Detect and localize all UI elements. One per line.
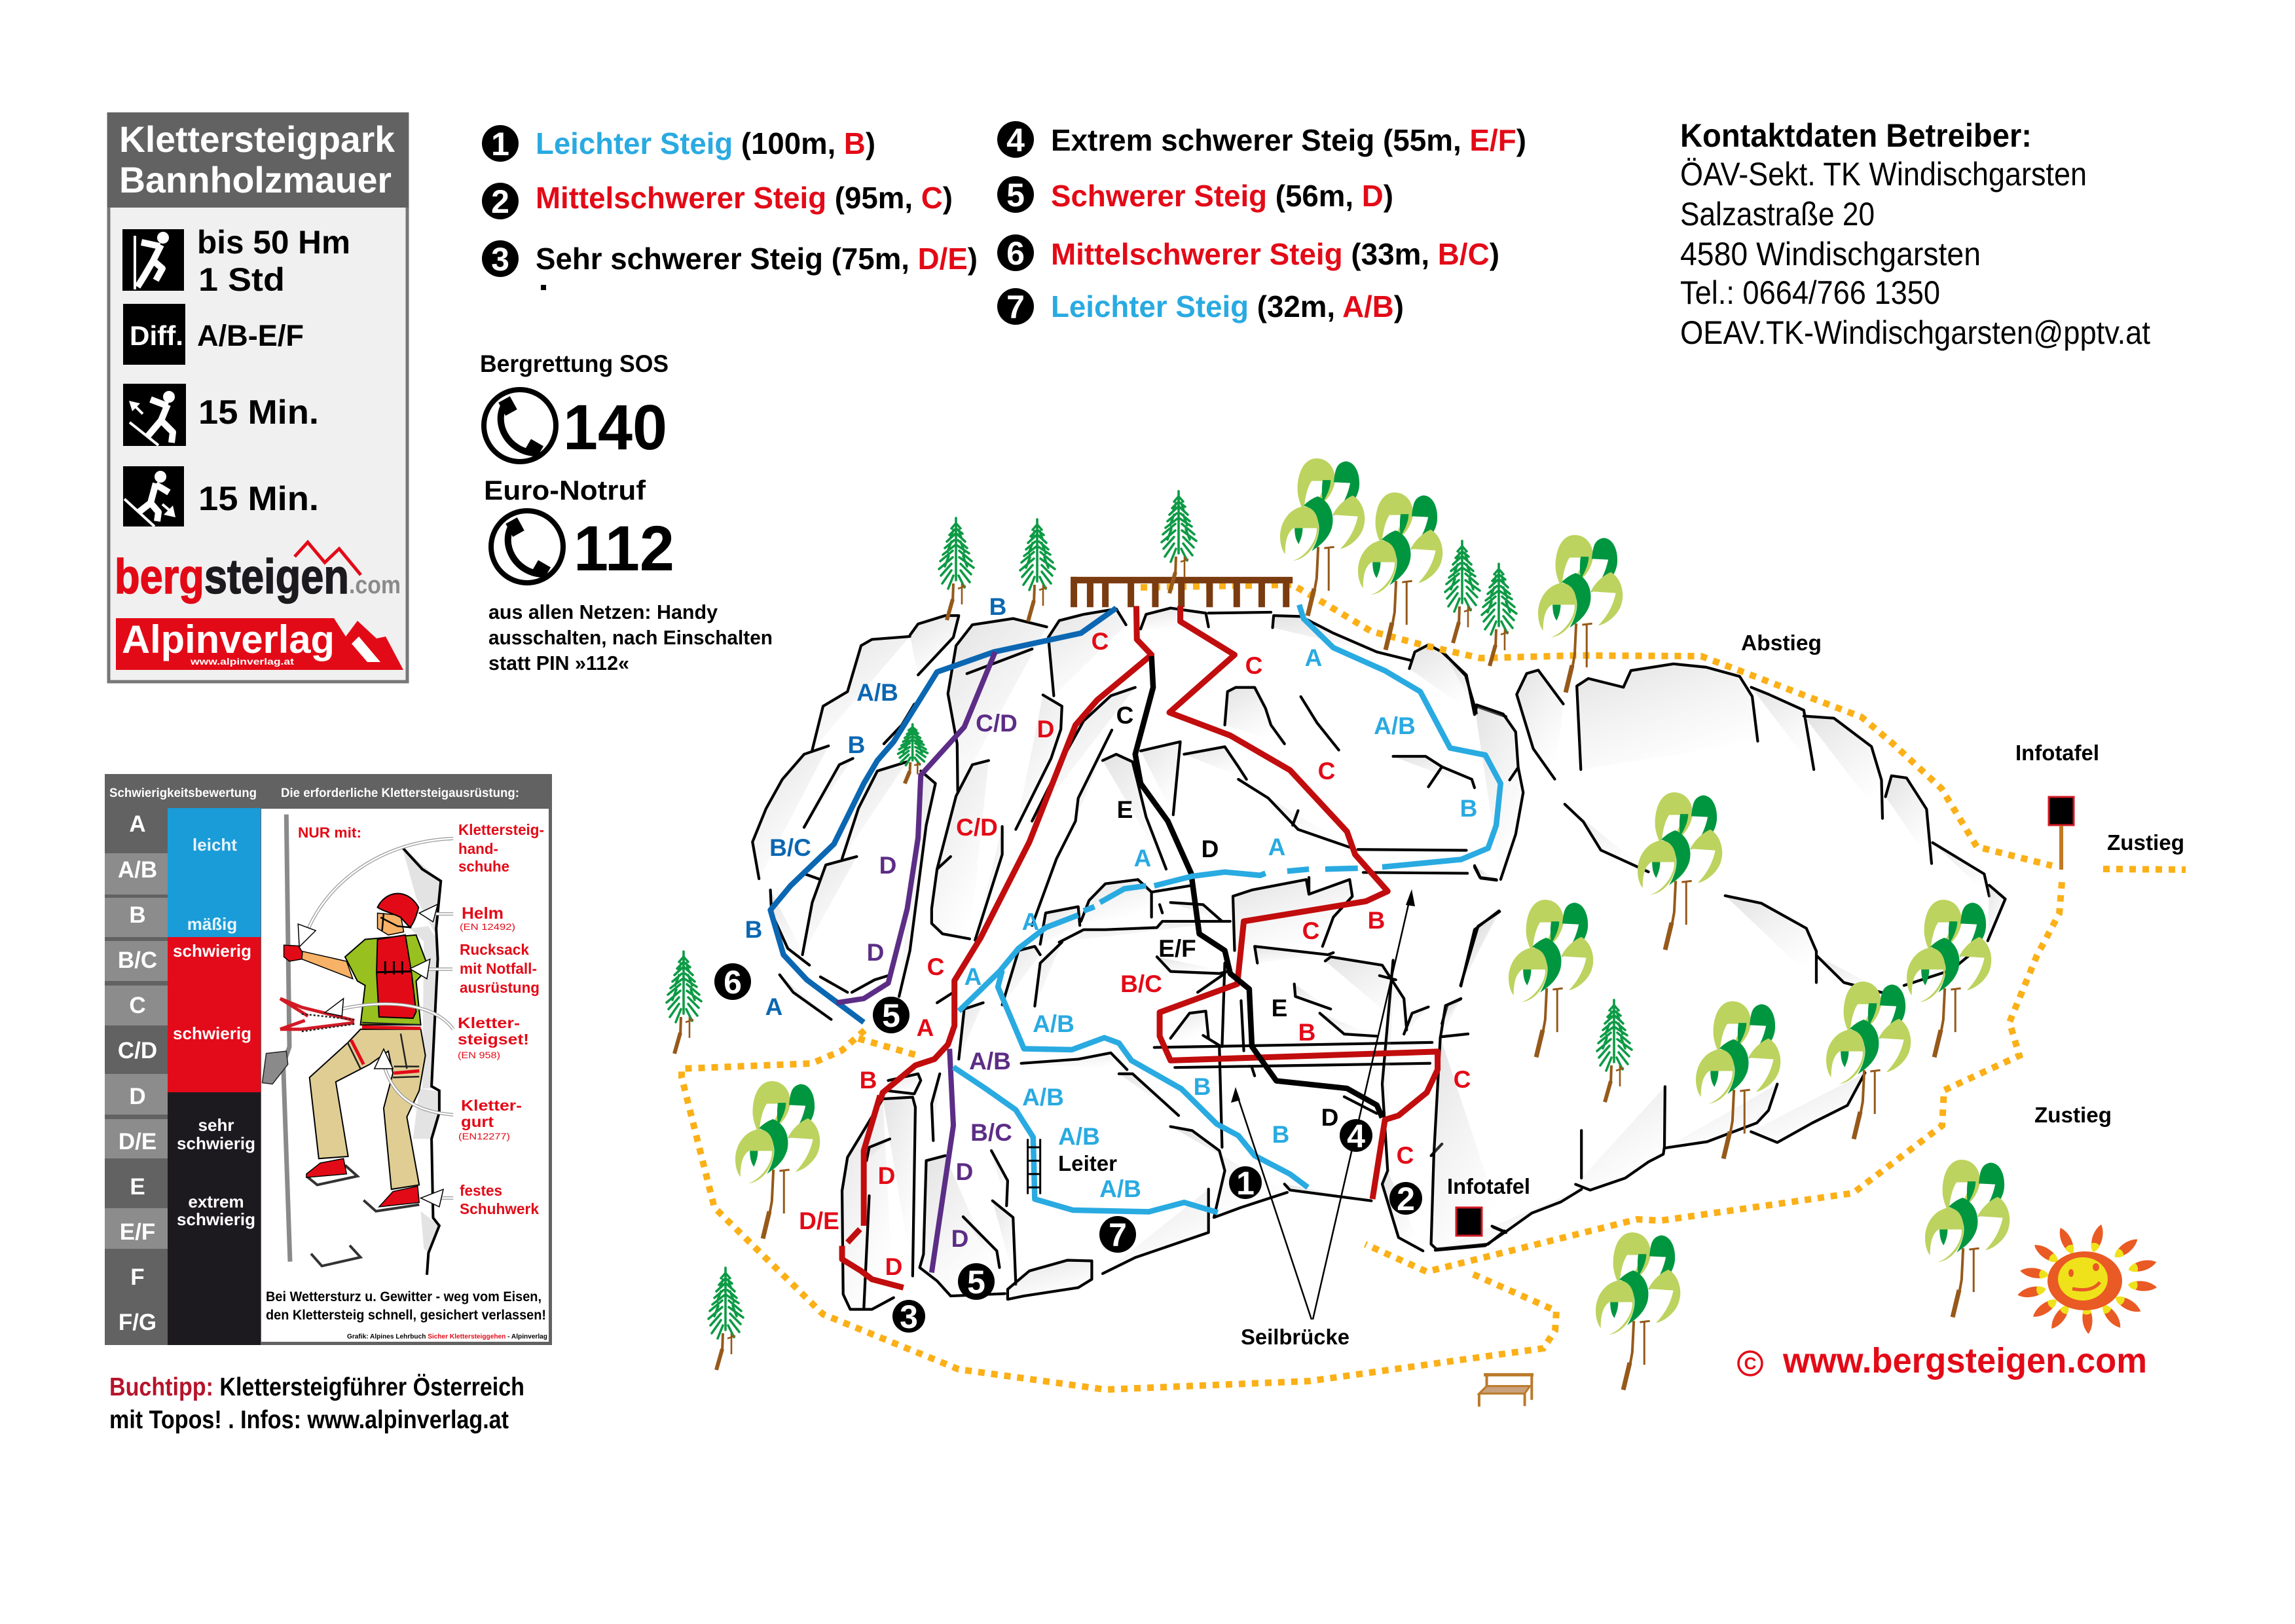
contact details <box>1680 117 2150 351</box>
logo: bergsteigen.com: .com <box>349 572 401 599</box>
route 7: 7 <box>1006 289 1025 325</box>
footpath: Zustieg legend <box>2103 869 2186 870</box>
sun <box>2017 1223 2157 1334</box>
marker 3: 3 <box>900 1299 918 1335</box>
marker 5 <box>958 1263 995 1301</box>
labels: red routes: C <box>1302 917 1319 944</box>
label: Abstieg: Abstieg <box>1741 631 1822 655</box>
text: height and duration <box>197 224 350 298</box>
labels: route 5: D <box>956 1158 973 1185</box>
panel heading: Klettersteigpark <box>119 119 395 160</box>
conifer trees <box>667 491 1632 1370</box>
heading: Bergrettung SOS: Bergrettung SOS <box>480 350 669 377</box>
footpath: spur to start <box>858 1039 918 1056</box>
logo: Alpinverlag: Alpinverlag <box>122 618 335 661</box>
equipment labels: Kletter- <box>458 1014 520 1031</box>
labels: black route: E/F <box>1158 935 1196 962</box>
equipment labels: Klettersteig- <box>458 821 544 838</box>
conifer <box>1482 564 1516 666</box>
illustration: climber on via ferrata <box>262 815 453 1275</box>
tree <box>1280 458 1365 616</box>
book tip: mit Topos! . Infos: www.alpinverlag.at <box>109 1406 509 1434</box>
labels: light blue routes: A/B <box>1022 1084 1064 1111</box>
tree <box>1907 900 1991 1057</box>
storm warning <box>266 1289 546 1323</box>
label: Infotafel upper: Infotafel <box>2015 741 2099 765</box>
marker 7: 7 <box>1109 1217 1127 1253</box>
tree <box>1596 1232 1680 1390</box>
contact details: Kontaktdaten Betreiber: <box>1680 117 2032 154</box>
conifer <box>708 1268 743 1370</box>
marker 5 <box>873 997 909 1034</box>
route 1: 1 <box>491 126 509 162</box>
marker 3 <box>892 1299 925 1335</box>
labels: route 6: B <box>745 916 762 943</box>
copyright and website: C <box>1744 1354 1757 1373</box>
panel: difficulty scale and equipment <box>105 774 552 1345</box>
panel heading <box>107 113 409 208</box>
equipment labels <box>298 821 544 1217</box>
route 6: Mittelschwerer Steig (33m, B/C) <box>1051 237 1499 271</box>
label: Infotafel lower: Infotafel <box>1447 1174 1530 1198</box>
panel: Klettersteigpark info <box>107 113 409 682</box>
equipment labels: Rucksack <box>460 941 529 958</box>
marker 1 <box>1229 1165 1262 1202</box>
labels: red routes: B <box>1298 1019 1315 1046</box>
labels: red routes: D <box>1037 716 1054 743</box>
route number markers on map <box>714 963 1422 1335</box>
grade scale: F/G <box>119 1310 156 1335</box>
labels: red routes: C <box>1245 652 1262 679</box>
difficulty colour bands: sehr <box>198 1115 234 1135</box>
conifer <box>1597 1000 1632 1102</box>
route 1: Leichter Steig (100m, B) <box>536 126 875 160</box>
marker 4 <box>1340 1118 1372 1154</box>
tree <box>1696 1001 1780 1158</box>
labels: red routes: C <box>1454 1066 1471 1093</box>
contact details: OEAV.TK-Windischgarsten@pptv.at <box>1680 314 2150 351</box>
footpath: Zustieg bottom <box>682 1029 1556 1390</box>
map: rock outlines lower right <box>1435 1073 1865 1250</box>
panel heading: Bannholzmauer <box>119 159 392 200</box>
difficulty colour bands <box>168 808 261 1345</box>
difficulty colour bands: schwierig <box>173 941 251 961</box>
labels: light blue routes: B <box>1272 1121 1289 1148</box>
tree <box>735 1081 820 1238</box>
number 112: 112 <box>574 513 674 584</box>
icon: phone <box>491 511 563 583</box>
equipment labels: mit Notfall- <box>460 960 537 977</box>
label: Zustieg lower: Zustieg <box>2034 1103 2112 1127</box>
note text: statt PIN »112« <box>488 652 629 674</box>
labels: route 5: D <box>867 939 884 966</box>
difficulty colour bands: leicht <box>193 835 237 855</box>
route 3 <box>482 240 978 290</box>
tree <box>1925 1160 2010 1317</box>
marker 5: 5 <box>967 1264 985 1301</box>
labels: red routes <box>799 628 1471 1280</box>
route 6: dark blue <box>771 608 1116 1022</box>
route 4: 4 <box>1006 122 1025 158</box>
note text: aus allen Netzen: Handy <box>488 600 718 623</box>
labels: light blue routes: B <box>1460 795 1477 822</box>
text: height and duration: bis 50 Hm <box>197 224 350 261</box>
labels: light blue routes: B <box>1194 1073 1211 1100</box>
labels: red routes: B/C <box>1120 970 1162 997</box>
labels: route 6 <box>745 593 1006 1020</box>
equipment labels: gurt <box>461 1113 494 1130</box>
labels: light blue routes: A/B <box>1033 1010 1074 1037</box>
map: rock outlines upper right <box>1441 655 2005 1037</box>
route 3: Sehr schwerer Steig (75m, D/E) <box>536 242 978 276</box>
icon: climbing height <box>122 229 184 291</box>
equipment labels: (EN 12492) <box>460 921 515 932</box>
equipment labels: schuhe <box>458 858 509 875</box>
icon: phone <box>484 390 556 462</box>
deciduous trees <box>735 458 2010 1390</box>
labels: light blue routes: A/B <box>1099 1175 1141 1202</box>
labels: route 6: A <box>765 993 782 1020</box>
ladder <box>1028 1139 1040 1194</box>
contact details: Salzastraße 20 <box>1680 196 1875 232</box>
text: descent time: 15 Min. <box>198 480 319 518</box>
bridge at top <box>1072 577 1293 607</box>
route 5: purple lower <box>932 1049 953 1272</box>
labels: light blue routes: A <box>964 963 982 990</box>
book tip <box>109 1373 524 1434</box>
labels: red routes: D <box>878 1162 895 1189</box>
storm warning: den Klettersteig schnell, gesichert verlassen! <box>266 1308 546 1323</box>
labels: black route: C <box>1116 702 1133 729</box>
legend: routes left column <box>482 125 978 290</box>
contact details: 4580 Windischgarsten <box>1680 236 1981 272</box>
note text <box>488 600 773 674</box>
equipment labels: ausrüstung <box>460 979 540 996</box>
small conifer <box>898 724 928 783</box>
route 5: 5 <box>1006 177 1025 213</box>
text: approach time: 15 Min. <box>198 394 319 432</box>
info board lower <box>1456 1208 1482 1236</box>
route 4: Extrem schwerer Steig (55m, E/F) <box>1051 123 1526 157</box>
marker 6: 6 <box>724 964 742 1001</box>
route 3: 3 <box>491 241 509 278</box>
label: Zustieg upper: Zustieg <box>2107 830 2184 855</box>
label: Leiter: Leiter <box>1058 1151 1117 1175</box>
route 4: black <box>1135 656 1382 1118</box>
equipment labels: festes <box>460 1182 502 1199</box>
logo: Alpinverlag: www.alpinverlag.at <box>190 656 294 667</box>
labels: black route: E <box>1272 995 1287 1022</box>
tree <box>1826 982 1911 1139</box>
icon: approach <box>123 384 186 446</box>
Seilbrücke pointer arrows <box>1231 889 1415 1320</box>
labels: black route: E <box>1117 796 1133 823</box>
map: rock outlines upper left <box>752 608 1506 1116</box>
map: rock outlines lower left <box>842 960 1506 1309</box>
text: difficulty range: A/B-E/F <box>197 319 304 352</box>
equipment labels: Schuhwerk <box>460 1200 539 1217</box>
label: Seilbrücke: Seilbrücke <box>1241 1325 1349 1349</box>
grade scale: D/E <box>119 1129 156 1154</box>
grade scale <box>105 811 168 1335</box>
number 140: 140 <box>563 392 667 463</box>
route 5: Schwerer Steig (56m, D) <box>1051 179 1393 213</box>
conifer <box>1445 541 1480 643</box>
labels: route 6: B <box>989 593 1006 620</box>
marker 2: 2 <box>1397 1181 1415 1217</box>
grade scale: B/C <box>118 948 157 973</box>
info board upper <box>2049 797 2074 870</box>
route 1: light blue upper <box>959 604 1501 1011</box>
emergency numbers <box>480 350 773 674</box>
labels: route 6: B/C <box>769 834 811 861</box>
labels: light blue routes: A <box>1305 644 1322 671</box>
labels: red routes: C <box>1092 628 1109 655</box>
conifer <box>1020 519 1055 621</box>
legend: routes right column <box>997 121 1526 325</box>
equipment labels: (EN12277) <box>458 1131 510 1141</box>
equipment labels: NUR mit: <box>298 824 361 841</box>
labels: route 5 <box>867 710 1018 1252</box>
tree <box>1538 535 1623 692</box>
labels: red routes: B <box>860 1067 877 1094</box>
grade scale: E <box>130 1174 145 1200</box>
grade scale: A/B <box>118 857 157 883</box>
book tip: Buchtipp: Klettersteigführer Österreich <box>109 1373 524 1401</box>
marker 7 <box>1099 1216 1136 1253</box>
grade scale: E/F <box>120 1219 155 1245</box>
route 3: red left upper <box>880 606 1152 1101</box>
grade scale: D <box>129 1084 146 1109</box>
copyright and website: www.bergsteigen.com <box>1782 1341 2147 1380</box>
route 2: 2 <box>491 183 509 220</box>
labels: route 5: D <box>951 1225 968 1252</box>
logo: bergsteigen.com: bergsteigen <box>115 549 349 604</box>
grade scale: A <box>129 811 146 837</box>
labels: route 5: A/B <box>969 1048 1011 1075</box>
difficulty colour bands: mäßig <box>187 914 237 934</box>
labels: red routes: C <box>1318 758 1335 784</box>
storm warning: Bei Wettersturz u. Gewitter - weg vom Eisen, <box>266 1289 542 1304</box>
difficulty colour bands: schwierig <box>173 1024 251 1043</box>
marker 2 <box>1389 1181 1422 1217</box>
labels: red routes: A <box>917 1014 934 1041</box>
grade scale: F <box>130 1264 145 1290</box>
place labels <box>1058 631 2184 1349</box>
route 1: light blue lower <box>998 970 1308 1187</box>
labels: light blue routes: A <box>1022 908 1039 935</box>
labels: route 6: A/B <box>856 679 898 706</box>
graphic credit: Grafik: Alpines Lehrbuch Sicher Klettersteiggehen - Alpinverlag <box>347 1333 547 1340</box>
equipment labels: (EN 958) <box>458 1050 500 1060</box>
route 7: light blue <box>953 1067 1218 1213</box>
route 6: 6 <box>1006 235 1025 272</box>
equipment labels: Helm <box>462 904 504 923</box>
grade scale: C/D <box>118 1038 157 1063</box>
header labels: Schwierigkeitsbewertung <box>109 786 257 800</box>
marker 4: 4 <box>1347 1118 1365 1154</box>
labels: red routes: B <box>1368 907 1385 934</box>
labels: red routes: C <box>927 953 944 980</box>
grade scale: C <box>129 993 146 1018</box>
marker 6 <box>714 963 751 1001</box>
route 2: Mittelschwerer Steig (95m, C) <box>536 181 953 215</box>
grade labels on routes <box>745 593 1477 1280</box>
marker 5: 5 <box>882 997 900 1034</box>
tree <box>1509 900 1593 1057</box>
heading: Euro-Notruf: Euro-Notruf <box>484 475 646 506</box>
labels: route 5: C/D <box>976 710 1018 737</box>
tree <box>1638 792 1722 950</box>
route 7: Leichter Steig (32m, A/B) <box>1051 289 1404 323</box>
labels: light blue routes <box>964 644 1477 1202</box>
icon: difficulty <box>123 304 185 365</box>
grade scale: B <box>129 902 146 928</box>
header labels: Die erforderliche Klettersteigausrüstung: <box>281 786 519 800</box>
equipment labels: steigset! <box>458 1031 529 1048</box>
difficulty colour bands: schwierig <box>177 1209 255 1229</box>
labels: route 6: B <box>848 731 865 758</box>
labels: light blue routes: A <box>1134 845 1151 872</box>
tree <box>1358 492 1442 650</box>
difficulty colour bands: extrem <box>188 1192 244 1211</box>
note text: ausschalten, nach Einschalten <box>488 626 773 649</box>
bench <box>1479 1375 1533 1407</box>
icon: descent <box>123 466 184 526</box>
contact details: ÖAV-Sekt. TK Windischgarsten <box>1680 156 2087 193</box>
icon: difficulty: Diff. <box>130 320 183 351</box>
contact details: Tel.: 0664/766 1350 <box>1680 274 1940 311</box>
labels: light blue routes: A/B <box>1374 712 1416 739</box>
labels: red routes: D/E <box>799 1208 839 1234</box>
footpath: Zustieg right <box>1365 882 2062 1272</box>
labels: black route: D <box>1202 836 1219 862</box>
conifer <box>1162 491 1196 593</box>
equipment labels: Kletter- <box>461 1097 522 1114</box>
labels: black route <box>1116 702 1338 1131</box>
labels: red routes: C/D <box>956 814 998 841</box>
labels: route 5: D <box>879 852 896 879</box>
text: height and duration: 1 Std <box>198 261 285 298</box>
header labels <box>109 786 519 800</box>
labels: red routes: C <box>1397 1142 1414 1169</box>
labels: black route: D <box>1321 1104 1338 1131</box>
labels: light blue routes: A <box>1268 834 1285 860</box>
equipment panel background <box>261 809 549 1342</box>
marker 1: 1 <box>1236 1165 1255 1202</box>
route 3: red left lower <box>842 1096 904 1287</box>
footpath: Abstieg <box>1141 585 2052 866</box>
labels: route 5: B/C <box>970 1119 1012 1146</box>
conifer <box>667 951 701 1054</box>
route 5: purple upper <box>837 652 995 1003</box>
conifer <box>939 518 974 620</box>
route 2: red right <box>1160 606 1438 1199</box>
equipment labels: hand- <box>458 840 498 857</box>
logo: Alpinverlag <box>116 618 403 670</box>
labels: light blue routes: A/B <box>1058 1123 1100 1150</box>
difficulty colour bands: schwierig <box>177 1134 255 1153</box>
labels: red routes: D <box>885 1253 902 1280</box>
